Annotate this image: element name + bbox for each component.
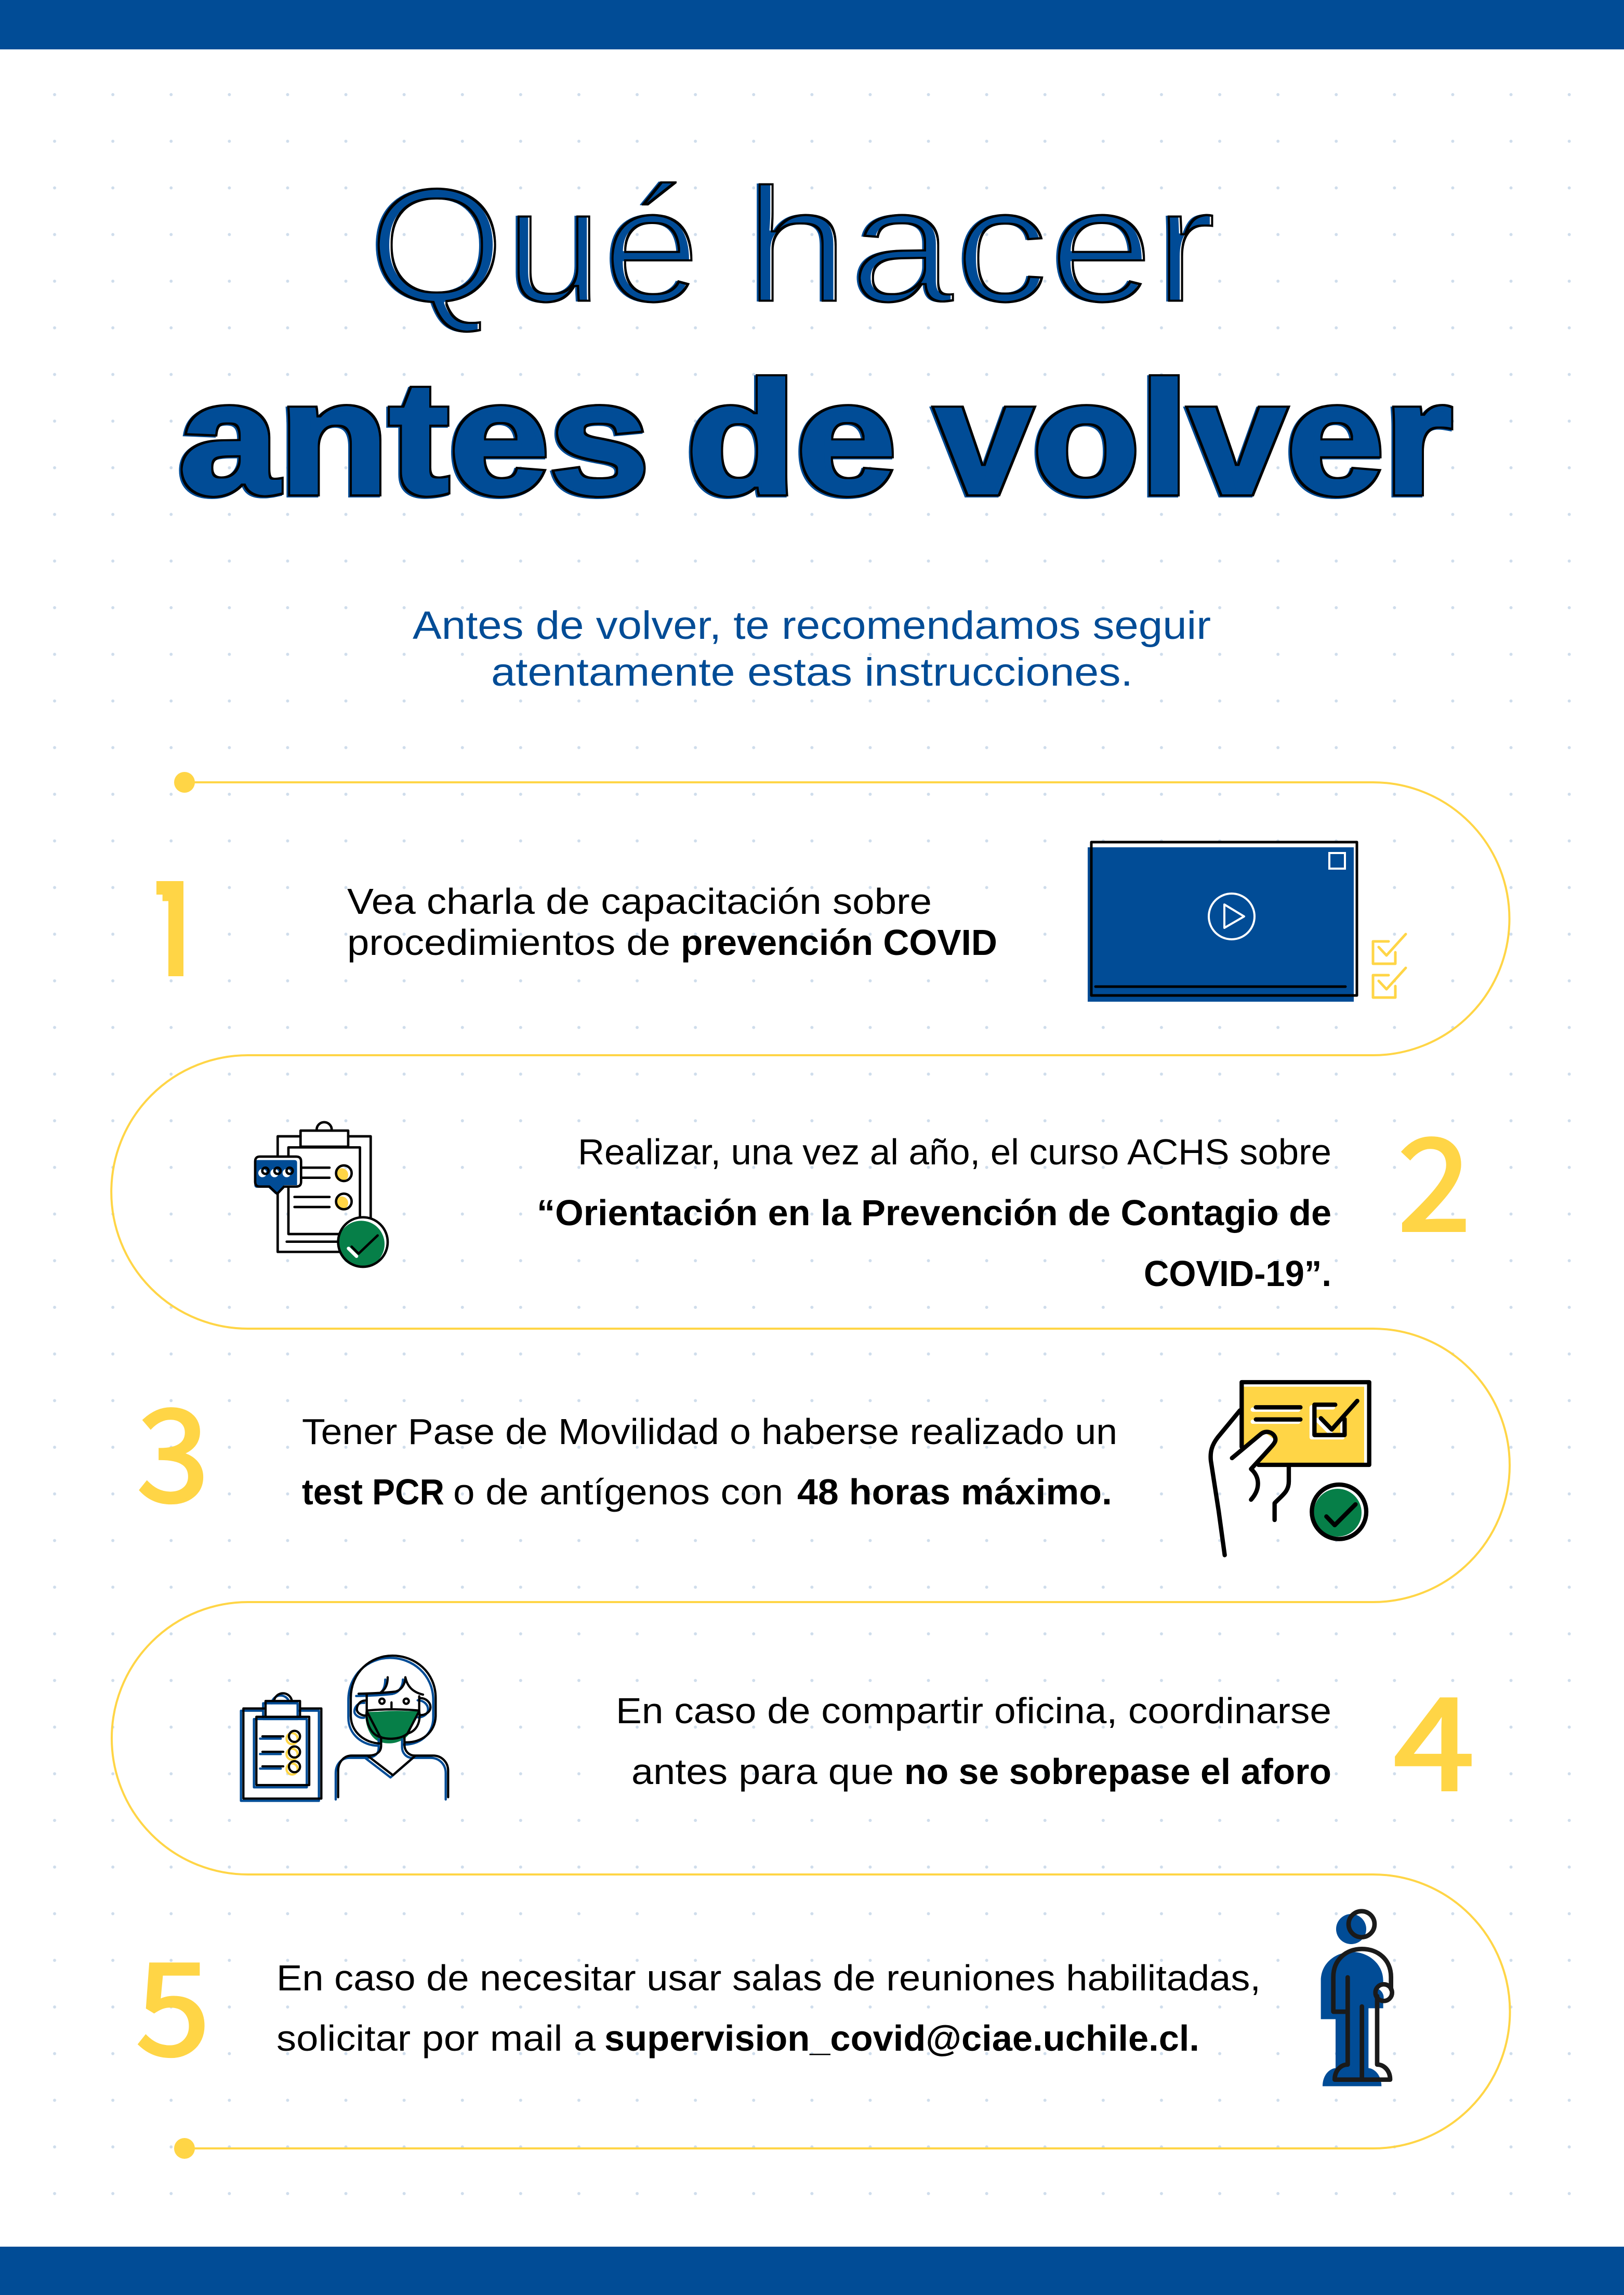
icon: hand holding card with check [1211,1382,1369,1555]
step 5 text: En caso de necesitar usar salas de reuniones habilitadas, [276,1958,1261,1998]
step 2 text: COVID-19”. [1144,1253,1331,1294]
title line 2 [177,349,1453,529]
title line 1: hacer [745,153,1217,337]
icon: check marks [1373,934,1406,998]
step 3 text: test PCR [302,1472,444,1512]
number 5: 5 [136,1907,210,2092]
title line 2: volver [935,349,1453,528]
step 4 text [616,1690,1331,1792]
step 2 text: “Orientación en la Prevención de Contagio de [537,1192,1331,1233]
icon: clipboard and masked person [241,1656,448,1801]
panel: step 1 [156,841,1407,1002]
step 2 text [537,1132,1331,1294]
number 1 [156,881,183,976]
step 5 text [276,1958,1261,2058]
step 4 text: En caso de compartir oficina, coordinarse [616,1690,1331,1731]
title line 2: de [685,350,895,529]
number 1: 1 [154,829,196,1013]
panel: step 5 [136,1907,1392,2092]
title [177,153,1453,529]
subtitle: atentamente estas instrucciones. [491,650,1133,694]
bottom bar [0,2247,1624,2295]
panel: step 3 [137,1354,1369,1555]
panel: step 4 [241,1642,1474,1827]
step 3 text: Tener Pase de Movilidad o haberse realizado un [302,1411,1117,1452]
step 3 text [302,1411,1117,1512]
icon: standing person [1321,1911,1392,2086]
title line 1 [366,153,1217,337]
title line 2: antes [177,350,648,529]
step 3 text: 48 horas máximo. [797,1472,1112,1512]
step 1 text: prevención COVID [681,922,997,963]
title line 1: hacer [742,153,1214,337]
title line 1: Qué [366,153,698,337]
subtitle [413,604,1211,694]
icon: clipboard with speech bubble and check [254,1122,388,1267]
step 5 text: supervision_covid@ciae.uchile.cl. [604,2018,1199,2058]
number 4: 4 [1394,1642,1474,1827]
step 3 text: o de antígenos con [453,1472,783,1512]
number 2: 2 [1398,1083,1471,1267]
connector track [111,772,1510,2159]
panel: step 2 [254,1083,1471,1294]
number 3: 3 [137,1354,209,1538]
step 1 text: Vea charla de capacitación sobre [347,881,932,922]
top bar [0,0,1624,49]
step 2 text: Realizar, una vez al año, el curso ACHS sobre [578,1132,1331,1172]
step 4 text: antes para que [631,1751,894,1792]
subtitle: Antes de volver, te recomendamos seguir [413,604,1211,648]
step 5 text: solicitar por mail a [276,2018,596,2058]
title line 2: de [686,349,896,528]
step 1 text [347,881,997,963]
step 4 text: no se sobrepase el aforo [904,1751,1331,1792]
step 1 text: procedimientos de [347,922,670,963]
title line 2: antes [179,349,650,528]
icon: video player [1088,842,1357,1002]
title line 1: Qué [368,153,701,337]
title line 2: volver [933,350,1451,529]
